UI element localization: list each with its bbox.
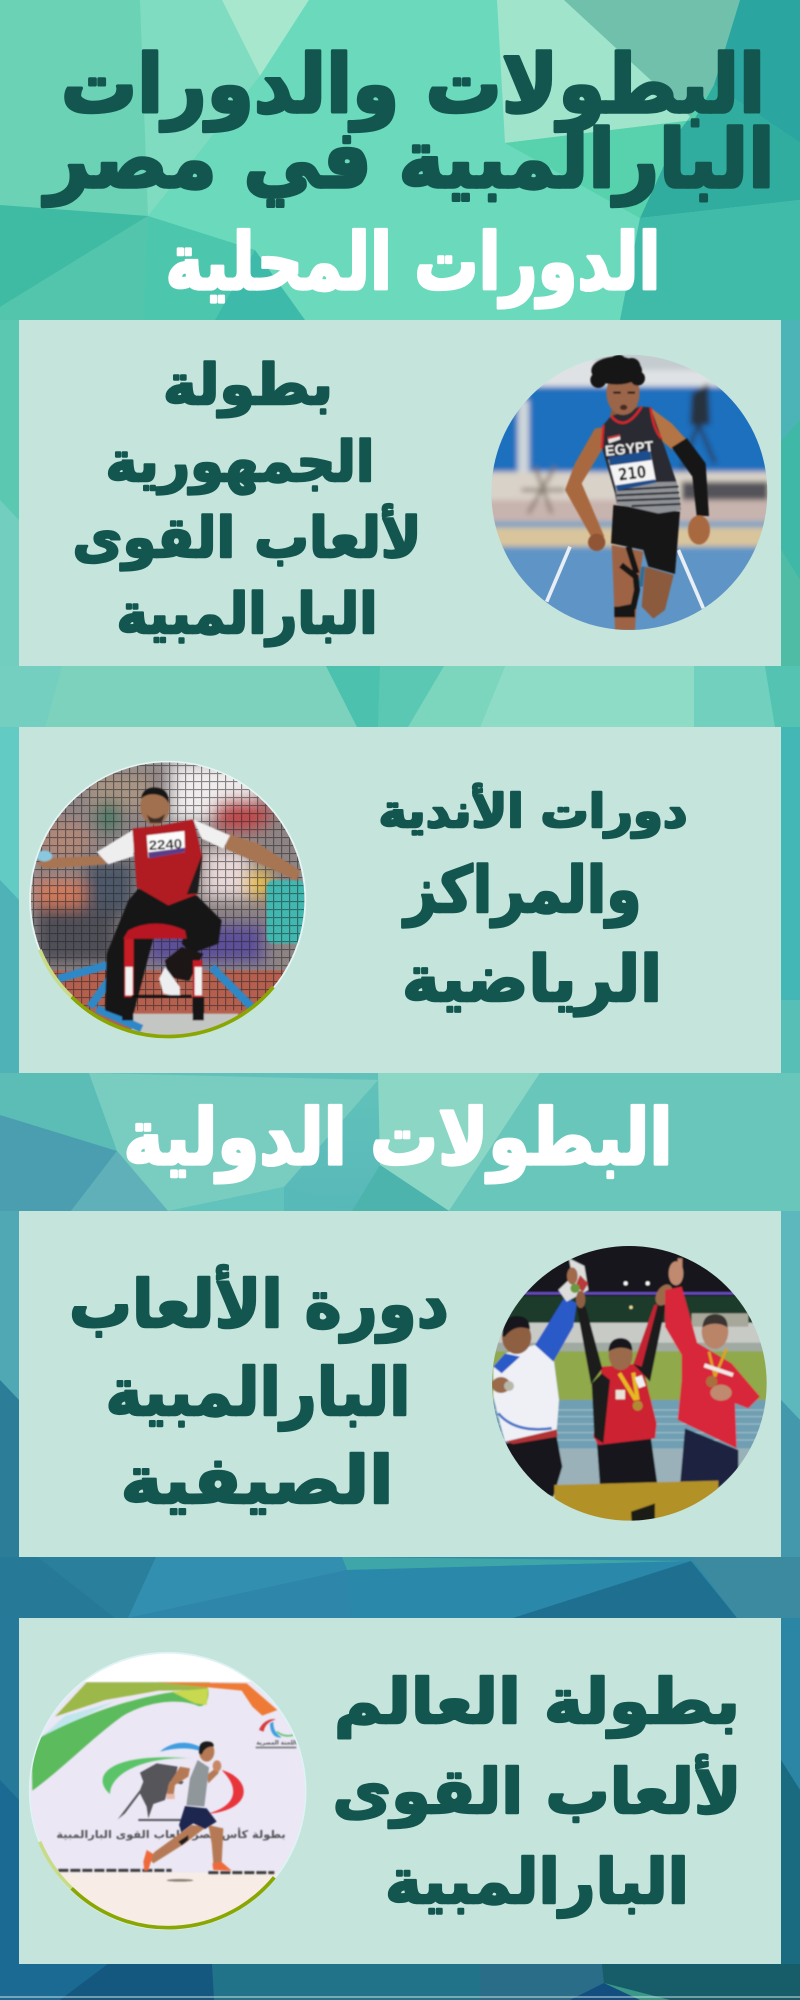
text: clubs and sports centers: دورات الأندية xyxy=(378,783,688,838)
olive rim xyxy=(40,950,72,997)
text: clubs and sports centers: والمراكز xyxy=(402,854,642,928)
text: summer paralympic games: الصيفية xyxy=(120,1442,394,1519)
text: republic championship xyxy=(72,353,422,647)
silhouette xyxy=(118,1763,184,1819)
center emblem xyxy=(103,1757,192,1794)
right athlete xyxy=(680,1428,738,1488)
left athlete xyxy=(505,1437,562,1497)
text: republic championship: الجمهورية xyxy=(106,430,374,495)
plate xyxy=(131,1012,239,1035)
arms xyxy=(37,855,107,869)
photo rim xyxy=(30,762,305,1037)
bib xyxy=(608,450,656,491)
sleeves xyxy=(97,829,135,864)
text: world para athletics championship xyxy=(332,1665,742,1918)
photo: sprinter in Egypt singlet number 210: 210 xyxy=(617,462,647,485)
front leg xyxy=(612,545,643,630)
olive rim xyxy=(40,1842,72,1888)
title: البارالمبية في مصر xyxy=(42,113,774,207)
text: summer paralympic games xyxy=(69,1264,449,1519)
text: clubs and sports centers xyxy=(378,783,688,1017)
shoe xyxy=(159,967,180,997)
floor edge xyxy=(58,1870,274,1873)
photo: seated discus thrower number 2240: 2240 xyxy=(148,836,182,853)
panel: world para athletics championship xyxy=(19,1618,781,1964)
sleeve xyxy=(672,438,709,516)
chair xyxy=(129,939,198,997)
photo: sprinter in Egypt singlet number 210 xyxy=(485,350,775,637)
panel: summer paralympic games xyxy=(19,1211,781,1557)
heading: local tournaments: الدورات المحلية xyxy=(166,218,660,308)
singlet xyxy=(602,407,681,513)
text: summer paralympic games: البارالمبية xyxy=(106,1354,410,1431)
text: republic championship: بطولة xyxy=(163,353,333,418)
flowers xyxy=(558,1258,588,1302)
back leg xyxy=(642,567,674,619)
bib xyxy=(147,831,185,858)
title: البطولات والدورات xyxy=(61,38,765,132)
head xyxy=(606,382,640,416)
text: world para athletics championship: لألعاب القوى xyxy=(332,1754,742,1828)
swooshes xyxy=(55,1682,210,1717)
shorts xyxy=(611,505,680,574)
text: republic championship: لألعاب القوى xyxy=(72,503,422,571)
neck xyxy=(610,400,640,428)
panel: clubs and sports centers xyxy=(19,727,781,1073)
photo: runner in front of Egypt cup banner: اللجنة المصرية xyxy=(256,1740,297,1746)
text: clubs and sports centers: الرياضية xyxy=(402,943,662,1017)
text: republic championship: البارالمبية xyxy=(116,582,378,647)
title xyxy=(42,38,774,207)
text: world para athletics championship: بطولة العالم xyxy=(334,1665,740,1738)
shirt xyxy=(132,819,202,905)
panel: republic championship xyxy=(19,320,781,666)
podium xyxy=(554,1481,718,1527)
head xyxy=(140,788,170,825)
right shoulder xyxy=(650,407,687,449)
photo: three medal winners on podium xyxy=(485,1240,775,1527)
banner text: بطولة كأس مصر لألعاب القوى البارالمبية xyxy=(56,1827,286,1841)
photo: runner in front of Egypt cup banner xyxy=(25,1650,312,1939)
straps xyxy=(58,965,252,1029)
text: world para athletics championship: البارالمبية xyxy=(385,1845,689,1918)
heading: international championships: البطولات الدولية xyxy=(124,1094,672,1183)
pants xyxy=(105,889,222,1020)
center athlete xyxy=(597,1438,658,1486)
hair xyxy=(590,355,645,388)
photo: sprinter in Egypt singlet number 210: EGYPT xyxy=(604,439,654,460)
text: summer paralympic games: دورة الألعاب xyxy=(69,1264,449,1344)
photo: seated discus thrower number 2240 xyxy=(25,757,312,1044)
left arm xyxy=(565,427,604,541)
logo xyxy=(259,1719,276,1732)
runner xyxy=(149,1825,207,1863)
